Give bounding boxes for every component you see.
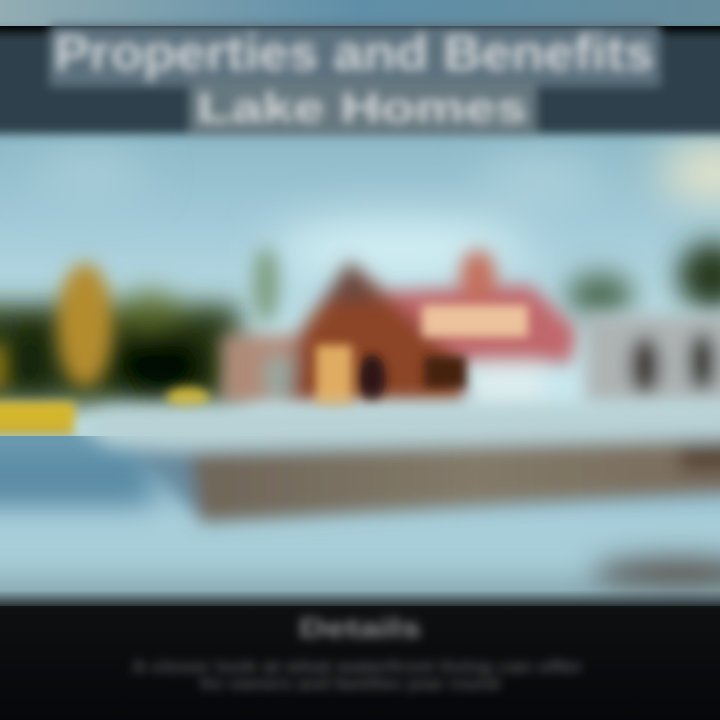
title banner [0, 0, 720, 136]
water [0, 436, 720, 606]
footer heading: Details [299, 613, 421, 643]
sky background [0, 120, 720, 440]
gold tree [0, 247, 279, 390]
title text [54, 25, 654, 131]
footer panel [0, 590, 720, 720]
terrace and stone wall [75, 400, 720, 522]
arcade building [585, 315, 720, 407]
house highlights [316, 305, 528, 409]
footer description [132, 659, 582, 693]
footer description: for owners and families year round [200, 676, 500, 693]
footer description: A closer look at what waterfront living can offer [132, 659, 582, 676]
house [222, 250, 578, 412]
lakeside trees [0, 242, 720, 405]
yellow lawn [0, 387, 210, 436]
title text: Properties and Benefits [54, 25, 654, 81]
title text: Lake Homes [197, 84, 527, 131]
